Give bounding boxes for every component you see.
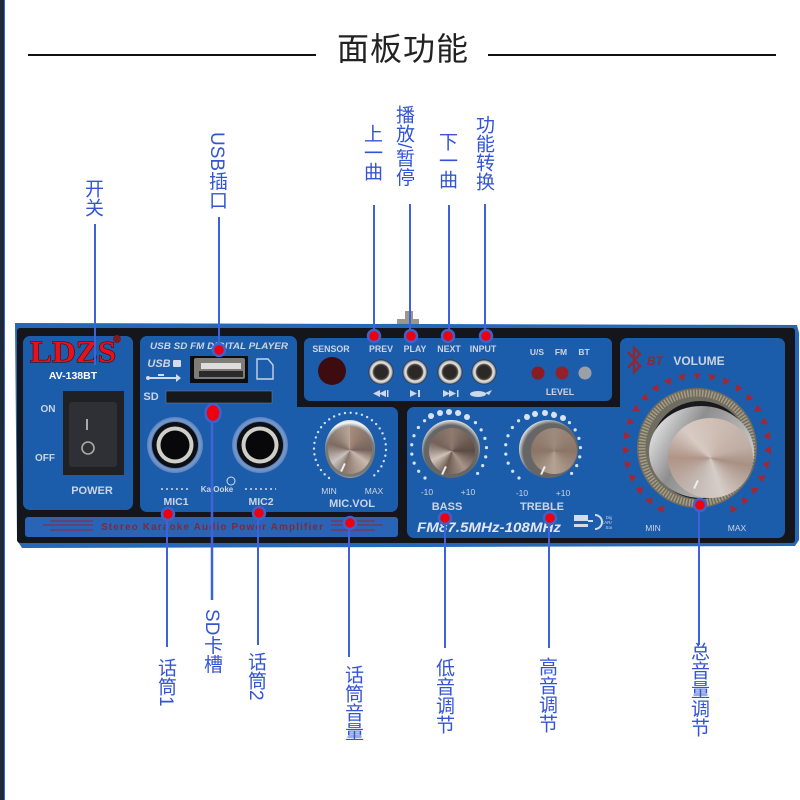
- panel: sensor and buttons: PREV: [369, 344, 393, 354]
- panel: volume: MIN: [645, 523, 661, 533]
- panel: USB SD and microphones: [140, 336, 398, 512]
- knob cap: [328, 426, 372, 474]
- panel: sensor and buttons: [304, 338, 612, 401]
- panel: bass treble: +10: [461, 487, 475, 497]
- panel: sensor and buttons: SENSOR: [312, 344, 350, 354]
- label: SD slot: SD卡槽: [201, 609, 222, 673]
- digital karaoke logo: Digital: [606, 515, 618, 520]
- panel: power: OFF: [35, 453, 55, 464]
- left edge strip: [0, 0, 5, 800]
- sensor window: [318, 357, 346, 385]
- knob: bass: [422, 420, 480, 478]
- title rule right: [488, 54, 776, 56]
- panel: USB SD and microphones: SD: [143, 391, 159, 403]
- leader lines: [95, 204, 699, 657]
- bass dots: [412, 409, 487, 478]
- label: mic 2: 话筒2: [245, 652, 266, 701]
- panel: sensor and buttons: PLAY: [404, 344, 426, 354]
- label: master volume: 总音量调节: [688, 642, 709, 737]
- panel: bass treble: [407, 407, 623, 538]
- panel: USB SD and microphones: MAX: [365, 486, 384, 496]
- panel: bass treble: TREBLE: [520, 501, 564, 513]
- panel: USB SD and microphones: MIC.VOL: [329, 498, 375, 510]
- panel: sensor and buttons: NEXT: [437, 344, 461, 354]
- MIC2 jack: [232, 417, 288, 473]
- USB symbol: [146, 360, 181, 382]
- panel: sensor and buttons: LEVEL: [546, 387, 575, 397]
- panel: sensor and buttons: U/S: [530, 347, 544, 357]
- label: mic volume: 话筒音量: [342, 665, 363, 741]
- panel: USB SD and microphones: MIC2: [248, 496, 274, 508]
- callout dots: [162, 330, 706, 529]
- label: previous track: 上一曲: [361, 124, 382, 181]
- label: play pause: 播放/暂停: [393, 105, 414, 186]
- volume tick ring: [623, 373, 771, 513]
- label: USB port: USB插口: [206, 132, 227, 209]
- panel: power: POWER: [71, 485, 113, 497]
- panel: power: [23, 334, 133, 510]
- panel: USB SD and microphones: MIC1: [163, 496, 189, 508]
- panel: volume: [612, 338, 785, 538]
- brand logo: LDZS: [30, 334, 116, 369]
- treble dots: [506, 410, 580, 478]
- toggle buttons: [368, 360, 496, 384]
- panel: USB SD and microphones: MIN: [321, 486, 337, 496]
- panel: sensor and buttons: BT: [578, 347, 590, 357]
- MIC1 jack: [147, 417, 203, 473]
- digital karaoke logo: Sound: [605, 525, 619, 530]
- panel: bass treble: FM87.5MHz-108MHz: [417, 519, 561, 535]
- panel: bottom strip: Stereo Karaoke Audio Power Amplifier: [101, 522, 323, 533]
- label: bass: 低音调节: [433, 658, 454, 734]
- title text: 面板功能: [337, 31, 469, 67]
- panel: sensor and buttons: FM: [555, 347, 567, 357]
- knob cap: [531, 428, 577, 474]
- knob: mic volume: [325, 420, 375, 478]
- panel: bottom strip: [25, 517, 398, 537]
- button icons: [373, 390, 492, 397]
- MIC.VOL dots: [314, 413, 386, 478]
- SD slot: [166, 391, 272, 403]
- label: next track: 下一曲: [436, 132, 457, 189]
- panel: bass treble: -10: [421, 487, 433, 497]
- panel: USB SD and microphones: USB: [147, 358, 171, 370]
- panel: bass treble: +10: [556, 488, 570, 498]
- panel: USB SD and microphones: USB SD FM DIGITAL PLAYER: [150, 341, 288, 351]
- volume knob base: [637, 388, 757, 508]
- title rule left: [28, 54, 316, 56]
- power switch: [63, 391, 124, 475]
- panel: bass treble: BASS: [432, 501, 462, 513]
- USB port: [190, 356, 248, 383]
- digital karaoke logo: KARAOKE: [601, 520, 623, 525]
- panel: USB SD and microphones: Ka Ooke: [201, 485, 234, 494]
- knob cap: [429, 428, 475, 474]
- panel: volume: VOLUME: [673, 354, 725, 368]
- panel: volume: MAX: [728, 523, 747, 533]
- knob: treble: [519, 420, 578, 478]
- panel: volume: BT: [647, 354, 665, 368]
- panel: power: ON: [40, 404, 56, 415]
- label: mic 1: 话筒1: [155, 658, 176, 707]
- rear nut: [397, 311, 419, 326]
- knob: master volume: [649, 406, 754, 498]
- panel: bass treble: -10: [516, 488, 528, 498]
- label: power switch: 开关: [82, 179, 103, 217]
- level LEDs: [532, 366, 544, 380]
- model number: AV-138BT: [49, 370, 98, 382]
- knob cap: [668, 418, 753, 498]
- bluetooth icon: [628, 348, 640, 372]
- label: treble: 高音调节: [536, 657, 557, 733]
- label: mode switch: 功能转换: [473, 115, 494, 191]
- digital karaoke logo: [574, 515, 623, 530]
- panel: sensor and buttons: INPUT: [470, 344, 497, 354]
- chassis: [15, 323, 799, 548]
